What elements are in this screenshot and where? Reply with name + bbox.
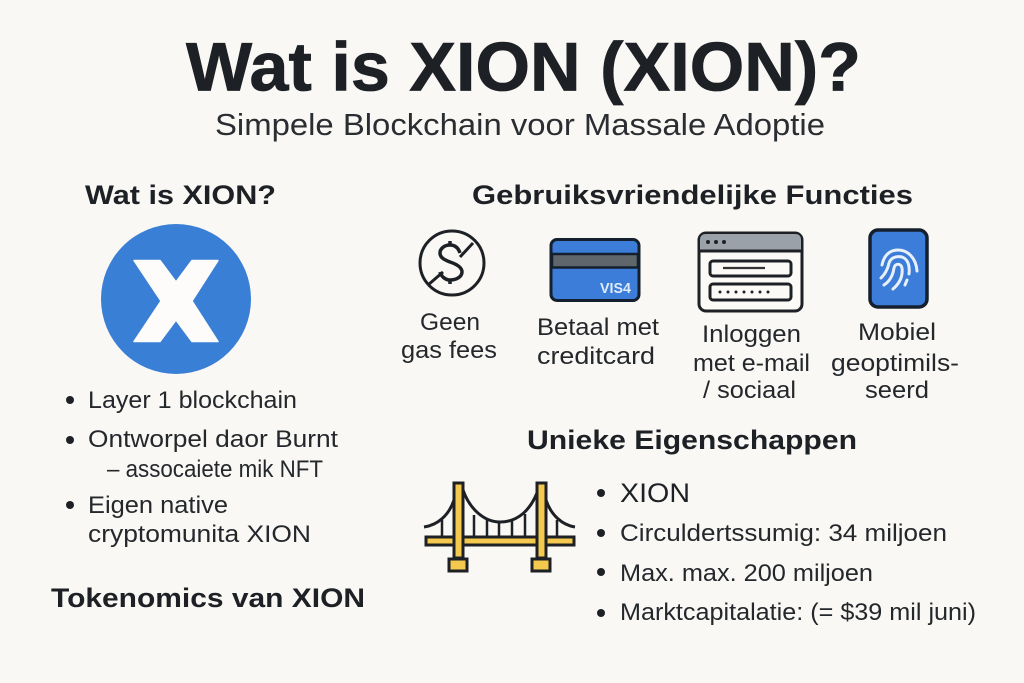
icon: bridge bbox=[424, 483, 575, 571]
label: geen gas fees: Geen bbox=[420, 309, 480, 336]
bullet list: XION basics: cryptomunita XION bbox=[88, 521, 311, 548]
bullet list: XION basics: Ontworpel daor Burnt bbox=[88, 426, 338, 453]
panel: gebruiksvriendelijke functies bbox=[401, 180, 959, 404]
heading: functies: Gebruiksvriendelijke Functies bbox=[472, 180, 913, 210]
bullet list: XION basics: Layer 1 blockchain bbox=[88, 387, 297, 414]
heading: tokenomics: Tokenomics van XION bbox=[51, 583, 365, 613]
icon: login window bbox=[699, 233, 802, 311]
icon: no gas fees bbox=[420, 231, 484, 295]
title: Wat is XION (XION)? bbox=[186, 28, 861, 106]
subtitle: Simpele Blockchain voor Massale Adoptie bbox=[215, 107, 825, 142]
label: mobiel geoptimaliseerd: seerd bbox=[865, 377, 929, 404]
panel: wat is XION bbox=[51, 180, 365, 613]
heading: unieke eigenschappen: Unieke Eigenschappen bbox=[527, 425, 857, 455]
bullet list: XION basics: Eigen native bbox=[88, 492, 228, 519]
icon: credit card: VIS4 bbox=[600, 281, 631, 297]
label: inloggen bbox=[693, 321, 810, 404]
label: inloggen: / sociaal bbox=[703, 377, 796, 404]
panel: unieke eigenschappen bbox=[424, 425, 976, 626]
label: mobiel geoptimaliseerd: geoptimils- bbox=[831, 350, 959, 377]
bullet list: properties: Circuldertssumig: 34 miljoen bbox=[620, 520, 947, 547]
label: betaal met creditcard: creditcard bbox=[537, 343, 655, 370]
heading: wat is XION: Wat is XION? bbox=[85, 180, 276, 210]
label: geen gas fees bbox=[401, 309, 497, 364]
label: inloggen: Inloggen bbox=[702, 321, 801, 348]
bullet list: properties bbox=[597, 478, 976, 626]
label: mobiel geoptimaliseerd: Mobiel bbox=[858, 319, 936, 346]
icon: credit card bbox=[551, 240, 639, 300]
label: mobiel geoptimaliseerd bbox=[831, 319, 959, 404]
label: betaal met creditcard bbox=[537, 314, 659, 370]
icon: mobile fingerprint bbox=[870, 230, 927, 307]
bullet list: XION basics: – assocaiete mik NFT bbox=[107, 456, 323, 483]
icon: XION logo bbox=[101, 224, 251, 374]
bullet list: properties: Marktcapitalatie: (= $39 mil juni) bbox=[620, 599, 976, 626]
bullet list: properties: Max. max. 200 miljoen bbox=[620, 560, 873, 587]
label: geen gas fees: gas fees bbox=[401, 337, 497, 364]
bullet list: properties: XION bbox=[620, 478, 690, 508]
bullet list: XION basics bbox=[66, 387, 338, 548]
label: inloggen: met e-mail bbox=[693, 350, 810, 377]
label: betaal met creditcard: Betaal met bbox=[537, 314, 659, 341]
